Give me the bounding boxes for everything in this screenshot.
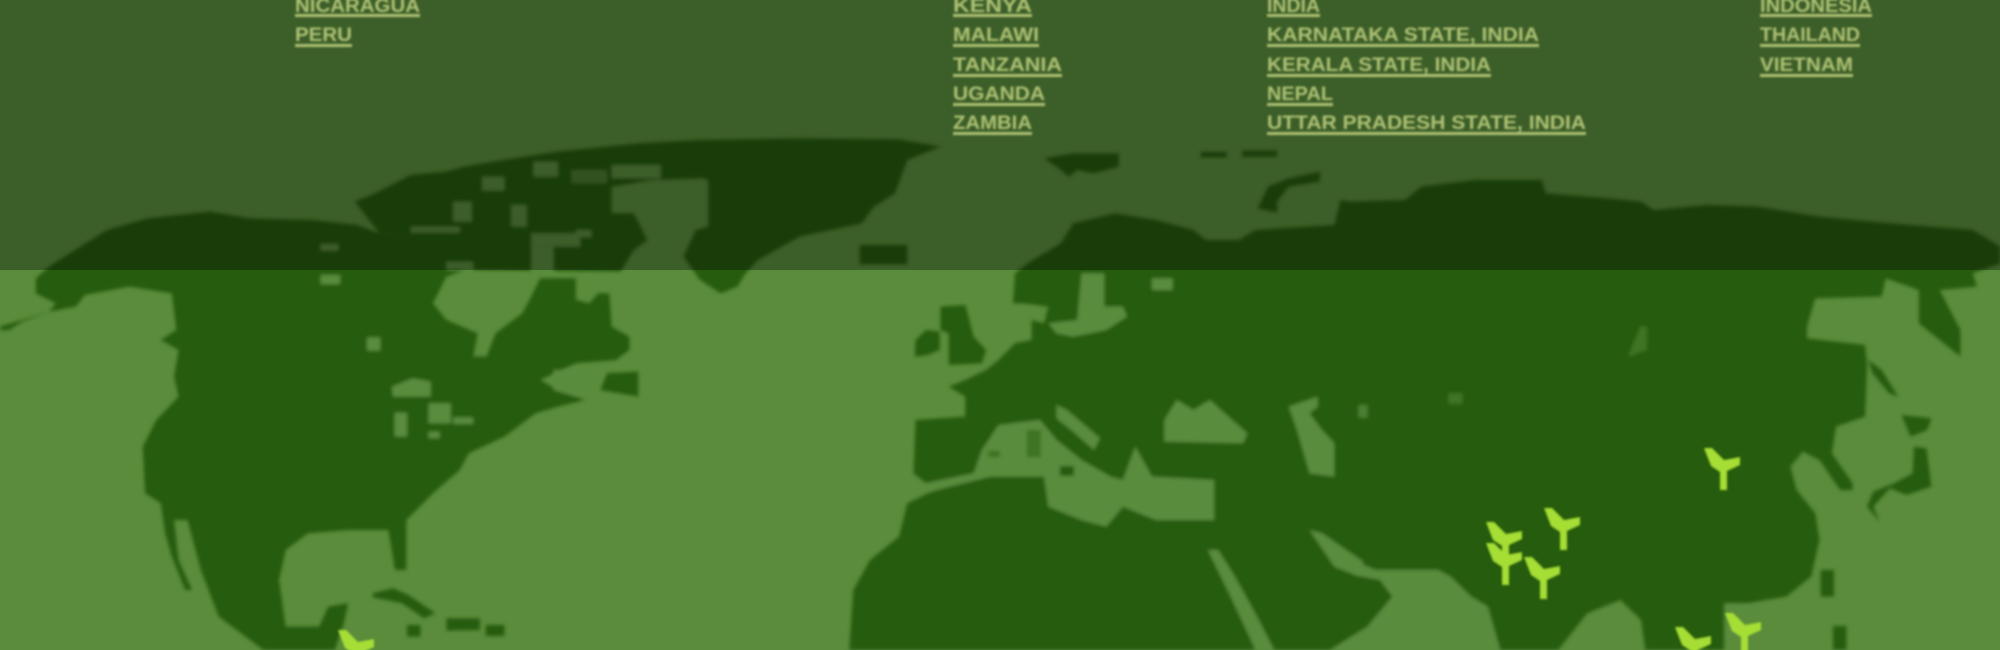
sprout marker: India north bbox=[1486, 543, 1522, 585]
list: Latin America bbox=[295, 0, 420, 47]
arctic archipelago bbox=[355, 140, 700, 272]
archipelago channels bbox=[411, 162, 661, 272]
Eurasia and Africa bbox=[849, 180, 2000, 650]
list: Latin America: PERU bbox=[295, 25, 352, 46]
list: South Asia bbox=[1267, 0, 1586, 135]
list: Africa: TANZANIA bbox=[953, 55, 1062, 76]
Lake Baikal and inland lakes bbox=[1628, 327, 1647, 357]
Iceland bbox=[860, 245, 907, 264]
Novaya Zemlya bbox=[1258, 172, 1320, 213]
list: Africa: UGANDA bbox=[953, 84, 1045, 105]
list: Southeast Asia: THAILAND bbox=[1760, 25, 1860, 46]
Caribbean islands bbox=[373, 588, 435, 618]
sprout marker: Vietnam bbox=[1725, 613, 1761, 650]
country lists bbox=[295, 0, 1872, 135]
sprout marker: Central America bbox=[338, 630, 374, 650]
sprout marker: China bbox=[1704, 448, 1740, 490]
landmass: Greenland and Eurasia bbox=[683, 138, 2000, 650]
list: Africa: ZAMBIA bbox=[953, 113, 1032, 134]
Japan and Pacific islands bbox=[1868, 360, 1898, 397]
list: South Asia: KARNATAKA STATE, INDIA bbox=[1267, 25, 1539, 46]
Mediterranean islands bbox=[1027, 430, 1041, 457]
top band bbox=[0, 0, 2000, 270]
list: Africa: MALAWI bbox=[953, 25, 1039, 46]
list: Southeast Asia bbox=[1760, 0, 1872, 77]
list: Southeast Asia: VIETNAM bbox=[1760, 55, 1853, 76]
seas bbox=[926, 273, 1761, 650]
landmass: North America bbox=[0, 140, 700, 650]
Svalbard bbox=[1044, 153, 1119, 177]
Ireland bbox=[915, 330, 940, 357]
list: Africa bbox=[953, 0, 1062, 135]
project markers bbox=[338, 448, 1761, 650]
list: South Asia: NEPAL bbox=[1267, 84, 1333, 105]
list: South Asia: UTTAR PRADESH STATE, INDIA bbox=[1267, 113, 1586, 134]
sprout marker: Nepal bbox=[1544, 508, 1580, 550]
Newfoundland bbox=[600, 372, 638, 397]
world map bbox=[0, 138, 2000, 650]
sprout marker: India east bbox=[1524, 557, 1560, 599]
sprout marker: Uttar Pradesh bbox=[1486, 522, 1522, 564]
list: South Asia: KERALA STATE, INDIA bbox=[1267, 55, 1491, 76]
Britain bbox=[940, 305, 986, 365]
great lakes bbox=[321, 244, 603, 438]
sprout marker: Thailand bbox=[1675, 627, 1711, 650]
